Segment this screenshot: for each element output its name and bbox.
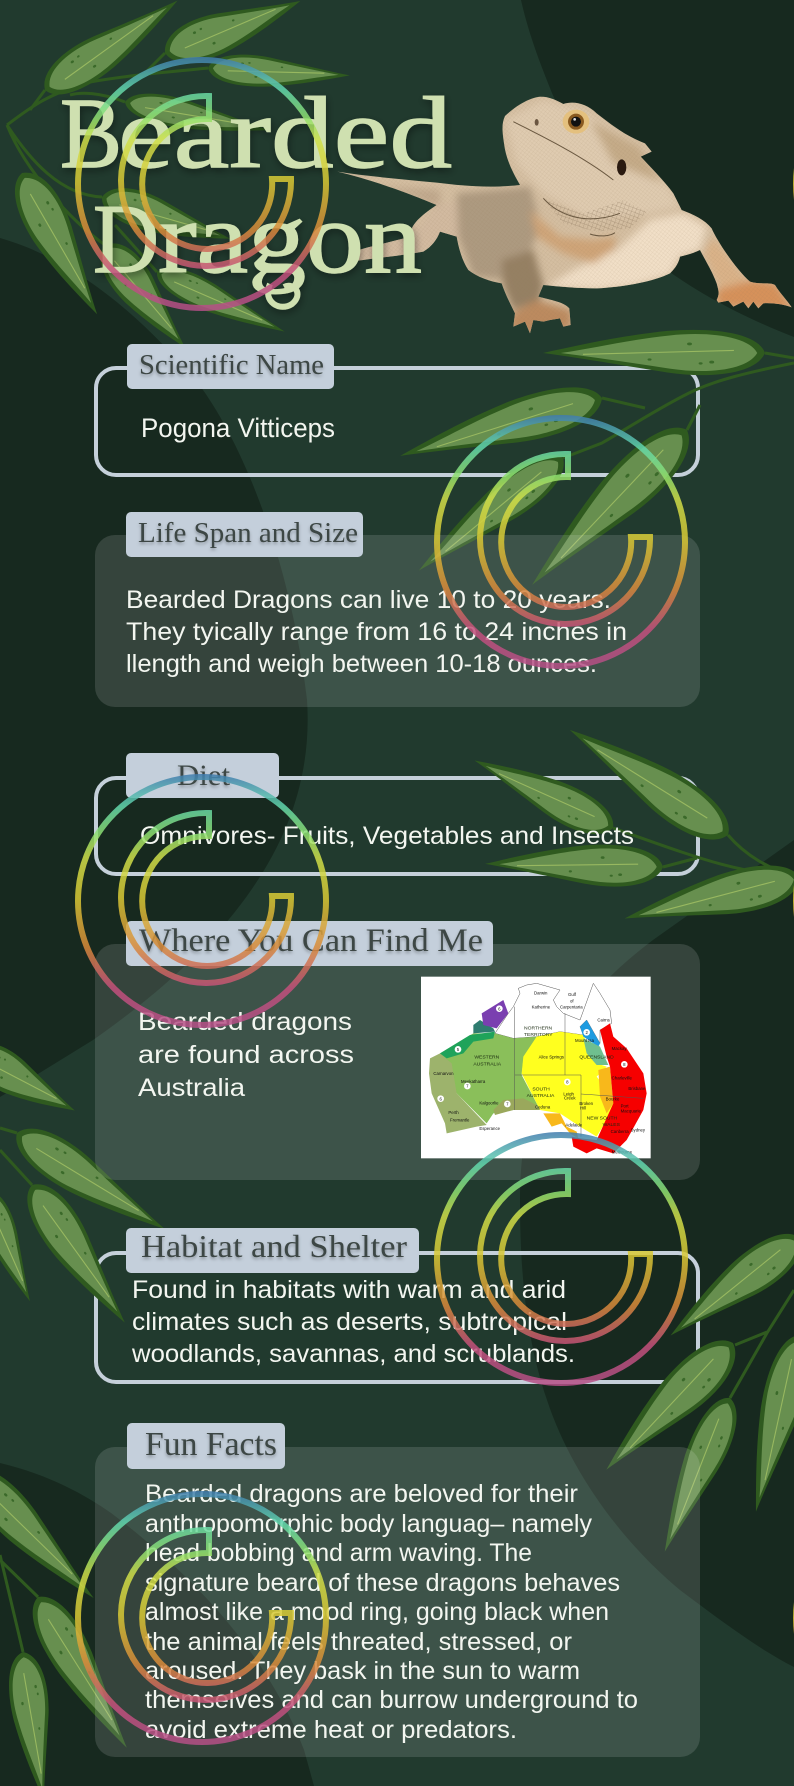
map: labels: Carpentaria [560, 1004, 583, 1009]
heading: habitat and shelter: Habitat and Shelter [141, 1228, 407, 1264]
map: labels: NEW SOUTH [587, 1115, 618, 1121]
map: labels: Alice Springs [539, 1054, 564, 1059]
watermark spiral: fun facts [78, 1494, 326, 1742]
text: fun facts: aroused. They bask in the sun to warm [145, 1657, 580, 1685]
map: labels: Brisbane [628, 1086, 646, 1091]
map: labels: WESTERN [474, 1055, 500, 1061]
map: labels: Carnarvon [433, 1071, 454, 1076]
map: numbered markers: 7 [466, 1084, 469, 1089]
map: dark green band [440, 1032, 495, 1058]
watermark spiral: diet [78, 777, 326, 1025]
text: life span: Bearded Dragons can live 10 to 20 years. [126, 586, 611, 614]
text: habitat [131, 1276, 575, 1368]
heading: fun facts [127, 1423, 285, 1469]
map: blue region [580, 1020, 600, 1047]
head pale [505, 100, 680, 220]
leaves: top left branch [2, 0, 351, 360]
text: fun facts: avoid extreme heat or predators. [145, 1716, 517, 1744]
belly [547, 213, 707, 290]
map: labels: NORTHERN [524, 1025, 553, 1031]
text: where: are found across [138, 1041, 354, 1069]
map: labels: Macquarie [621, 1108, 641, 1113]
leaves: bottom left branch [0, 1456, 144, 1786]
text: life span [126, 586, 627, 678]
map: numbered markers: 5 [457, 1047, 460, 1052]
map: northern outline [495, 983, 612, 1043]
map: labels: Creek [564, 1096, 576, 1101]
map: labels: Mount Isa [575, 1038, 595, 1043]
text: where [138, 1008, 354, 1102]
map: state borders [514, 1007, 643, 1137]
map: labels: AUSTRALIA [473, 1062, 502, 1068]
map: orange regions [543, 1067, 613, 1138]
forearm [502, 250, 543, 310]
map: labels: Canberra [611, 1129, 629, 1134]
text: diet: Omnivores- Fruits, Vegetables and Insects [140, 822, 634, 850]
heading: fun facts: Fun Facts [145, 1426, 277, 1463]
map: labels: Katherine [532, 1004, 551, 1009]
title: earded [118, 77, 452, 190]
hind leg [350, 197, 483, 262]
panel: life span background [95, 535, 700, 707]
heading: where you can find me: Where You Can Find Me [139, 923, 483, 959]
text: habitat: woodlands, savannas, and scrublands. [131, 1340, 575, 1368]
map: labels: Leigh [563, 1092, 575, 1097]
body back [457, 187, 540, 280]
text: habitat: climates such as deserts, subtropical [132, 1308, 567, 1336]
lizard body clipped to silhouette [330, 90, 794, 340]
outline box: diet [96, 778, 698, 874]
leaves: middle right branch [466, 711, 794, 939]
map: numbered markers: 8 [623, 1062, 626, 1067]
map: labels: SOUTH [532, 1086, 550, 1092]
map: labels: Ceduna [535, 1105, 551, 1110]
text: fun facts [145, 1480, 638, 1744]
map: labels: Meekatharra [461, 1079, 486, 1084]
text: fun facts: themselves and can burrow underground to [145, 1686, 638, 1714]
panel: fun facts background [95, 1447, 700, 1757]
text: life span: llength and weigh between 10-18 ounces. [126, 650, 597, 678]
text: fun facts: head bobbing and arm waving. The [145, 1539, 532, 1567]
heading: life span and size [126, 512, 363, 557]
map: labels: of [570, 999, 574, 1004]
map: labels: Perth [448, 1110, 459, 1115]
heading: diet: Diet [177, 759, 231, 792]
leaves: lower right branch [590, 1221, 794, 1559]
map: teal green region [583, 1038, 608, 1065]
watermark spiral: life span [437, 418, 685, 666]
text: life span: They tyically range from 16 to 24 inches in [126, 618, 627, 646]
map: labels: Esperance [479, 1126, 501, 1131]
map: teal band [473, 1020, 495, 1033]
map: labels [433, 991, 646, 1154]
map: labels: WALES [603, 1122, 621, 1128]
map: purple region [482, 1000, 508, 1028]
front foot [508, 300, 572, 335]
map: green interior [440, 1033, 540, 1123]
leaves: upper right branch [394, 330, 794, 602]
outline box: habitat and shelter [96, 1253, 698, 1382]
title [60, 77, 452, 307]
map: labels: Melbourne [612, 1149, 633, 1154]
heading: scientific name: Scientific Name [139, 349, 324, 381]
text: where: Australia [138, 1074, 245, 1102]
map: labels: Bourke [606, 1097, 620, 1102]
map: labels: Broken [579, 1101, 594, 1106]
scale texture [347, 97, 790, 310]
heading: diet [126, 753, 279, 798]
title: ragon [158, 182, 422, 295]
map: australia distribution [421, 977, 651, 1158]
map: labels: Adelaide [565, 1123, 583, 1128]
text: fun facts: signature beard of these dragons behaves [145, 1569, 620, 1597]
jaw and chest lines [513, 122, 620, 236]
map: numbered markers: 8 [566, 1080, 569, 1085]
map: olive band [493, 1098, 540, 1115]
heading: scientific name [127, 344, 334, 389]
text: fun facts: the animal feels threated, stressed, or [145, 1628, 572, 1656]
heading: habitat and shelter [126, 1228, 419, 1273]
map: numbered markers [437, 1005, 628, 1107]
text: habitat: Found in habitats with warm and arid [132, 1276, 566, 1304]
map: labels: Port [621, 1104, 629, 1109]
nostril [535, 119, 539, 126]
panel: where you can find me background [95, 944, 700, 1180]
ear [617, 159, 626, 175]
map: labels: Hill [580, 1106, 586, 1111]
map: labels: Mackay [612, 1046, 627, 1051]
map: west coast [429, 1053, 487, 1133]
map: numbered markers: 7 [506, 1102, 509, 1107]
text: where: Bearded dragons [138, 1008, 352, 1036]
watermark spiral: title [78, 60, 326, 308]
map: labels: Gulf [568, 992, 577, 997]
outline box: scientific name [96, 368, 698, 475]
watermark spiral: habitat [437, 1135, 685, 1383]
title: B [60, 77, 122, 189]
map: labels: QUEENSLAND [579, 1054, 614, 1060]
text: fun facts: anthropomorphic body languag– namely [145, 1510, 592, 1538]
beard scales [543, 198, 647, 232]
tail shading [388, 186, 442, 207]
map: labels: Kalgoorlie [479, 1100, 499, 1105]
right arm and foot [703, 237, 750, 290]
map: labels: TERRITORY [524, 1032, 553, 1038]
heading: life span and size: Life Span and Size [138, 517, 358, 549]
map: labels: Darwin [534, 991, 548, 996]
text: scientific name: Pogona Vitticeps [141, 413, 335, 443]
text: fun facts: almost like a mood ring, going black when [145, 1598, 609, 1626]
map: red region [572, 1023, 647, 1153]
map: numbered markers: 2 [585, 1030, 588, 1035]
map: numbered markers: 6 [498, 1006, 501, 1011]
photo: bearded dragon [330, 90, 794, 340]
map: numbered markers: 6 [439, 1096, 442, 1101]
text: fun facts: Bearded dragons are beloved for their [145, 1480, 578, 1508]
map: labels: Fremantle [450, 1117, 470, 1122]
throat [530, 210, 617, 263]
brow [590, 120, 663, 183]
map: labels: Cairns [597, 1017, 610, 1022]
map: labels: AUSTRALIA [527, 1093, 555, 1099]
map: labels: Sydney [631, 1128, 646, 1133]
leaves: middle left branch [0, 1033, 176, 1335]
map: labels: Charleville [612, 1076, 632, 1081]
map: yellow region [522, 1032, 617, 1137]
title: D [93, 185, 159, 294]
eye [563, 110, 589, 134]
